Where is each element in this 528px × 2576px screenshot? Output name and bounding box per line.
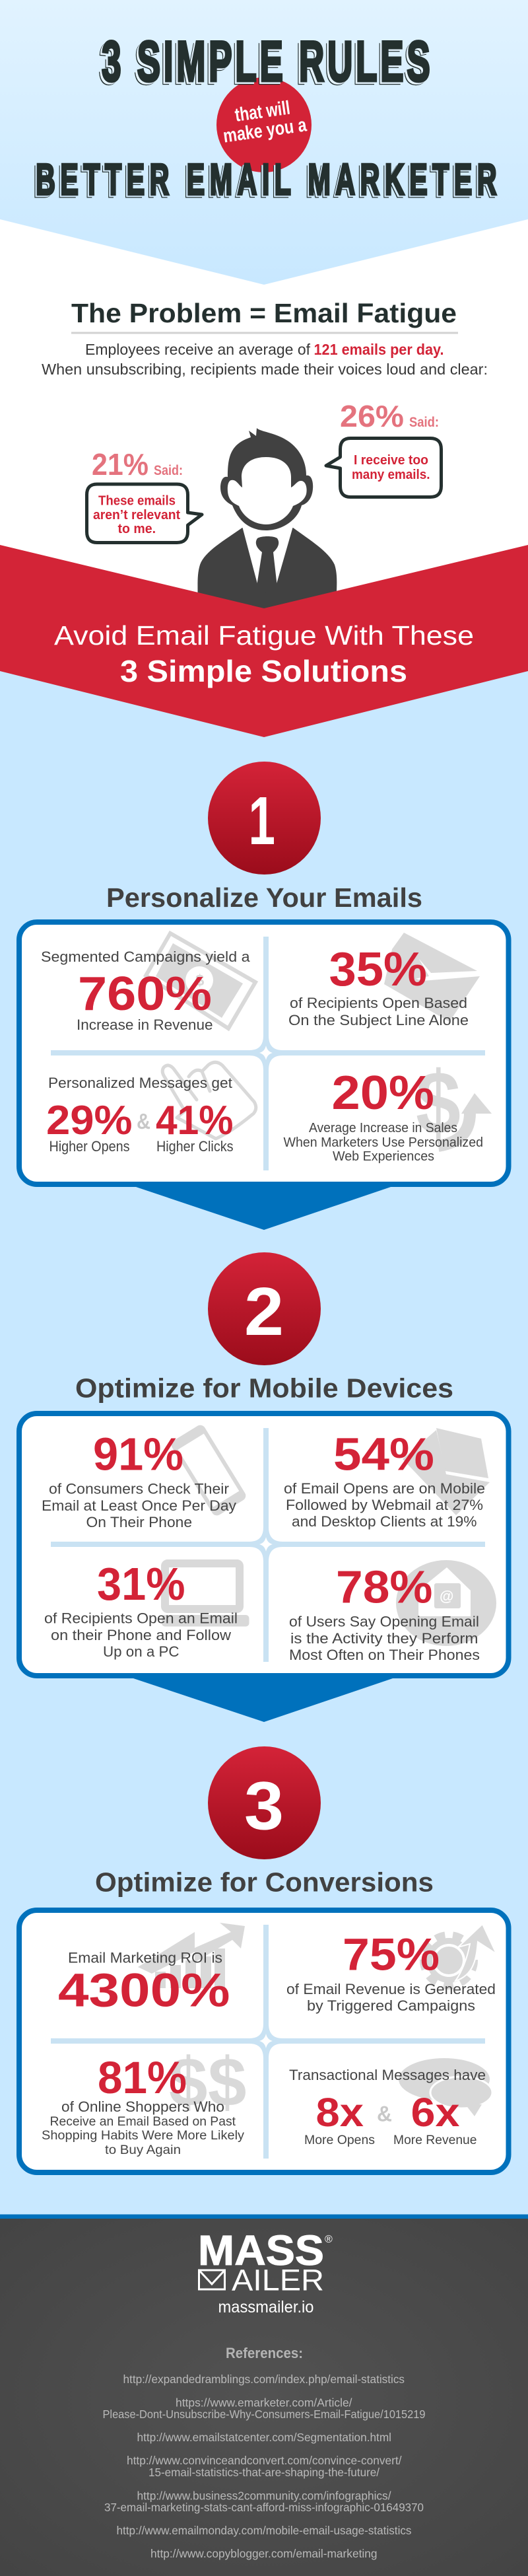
references list: http://www.business2community.com/infographics/ (137, 2489, 391, 2502)
title line two: BETTER EMAIL MARKETER (34, 157, 495, 205)
stat: 31%: on their Phone and Follow (51, 1627, 231, 1643)
stat: 31%: Up on a PC (103, 1643, 180, 1660)
stat: 54%: Followed by Webmail at 27% (286, 1497, 483, 1513)
icon: open envelope (403, 1428, 490, 1515)
stat: 760% increase (41, 948, 250, 1033)
stat: 81% shoppers: Shopping Habits Were More Likely (42, 2129, 245, 2143)
heading: the problem: The Problem = Email Fatigue (71, 298, 457, 328)
number badge 2: 2 (244, 1273, 284, 1349)
stat: 8x and 6x: & (377, 2102, 392, 2126)
stat: 29% and 41%: Higher Clicks (156, 1138, 234, 1155)
title line two: BETTER EMAIL MARKETER (33, 157, 494, 206)
title: 3 SIMPLE RULES (99, 33, 428, 96)
stat: 29% and 41%: Personalized Messages get (48, 1075, 232, 1091)
panel 3: conversions (19, 1910, 508, 2172)
logo: Mass Mailer: AILER (232, 2263, 324, 2297)
stat: 20% increase: 20% (331, 1067, 434, 1120)
website: massmailer.io (218, 2298, 314, 2316)
heading: optimize for mobile devices: Optimize for Mobile Devices (75, 1373, 453, 1403)
icon: email speech bubble: @ (440, 1588, 453, 1604)
badge text: that will (234, 97, 292, 126)
stat: 4300% ROI: 4300% (58, 1964, 230, 2017)
stat: 760% increase: Increase in Revenue (77, 1017, 213, 1033)
references list: http://www.convinceandconvert.com/convince-convert/ (127, 2454, 402, 2467)
icon: dollar with arrow (416, 1053, 492, 1153)
red chevron banner (0, 545, 528, 737)
stat: 81% shoppers: 81% (98, 2052, 187, 2103)
logo: Mass Mailer: MASS (198, 2227, 324, 2274)
stat: 54% (284, 1428, 485, 1530)
stat: 26% said: 26% (340, 399, 404, 433)
icon: laptop (162, 1563, 249, 1626)
references list: http://expandedramblings.com/index.php/email-statistics (123, 2373, 405, 2386)
title line two: BETTER EMAIL MARKETER (36, 155, 497, 204)
title: 3 SIMPLE RULES (100, 32, 428, 96)
references list: http://www.emailmonday.com/mobile-email-usage-statistics (116, 2524, 412, 2537)
logo: Mass Mailer (198, 2227, 333, 2297)
stat: 29% and 41%: & (137, 1109, 150, 1133)
logo: Mass Mailer: ® (325, 2234, 333, 2245)
speech bubble: these emails aren't relevant to me (87, 484, 202, 543)
stat: 20% increase (284, 1067, 483, 1164)
references list: 15-email-statistics-that-are-shaping-the-future/ (148, 2466, 380, 2479)
stat: 91%: of Consumers Check Their (49, 1481, 229, 1497)
title: 3 SIMPLE RULES (102, 30, 430, 94)
intro text (42, 341, 488, 378)
badge text: make you a (222, 114, 308, 147)
stat: 31%: 31% (97, 1558, 185, 1610)
stat: 78%: of Users Say Opening Email (289, 1613, 479, 1630)
stat: 78%: is the Activity they Perform (290, 1630, 478, 1647)
stat: 81% shoppers: to Buy Again (105, 2143, 181, 2157)
references list (103, 2373, 425, 2560)
icon: gear with arrow (425, 1924, 496, 1984)
speech bubble: I receive too many emails: I receive too (354, 453, 428, 468)
stat: 81% shoppers (42, 2052, 245, 2157)
number badge 3 (208, 1746, 321, 1859)
stat: 75% revenue: by Triggered Campaigns (307, 1997, 475, 2014)
speech bubble: these emails aren't relevant to me: to me. (117, 522, 156, 536)
panel: the problem (42, 298, 488, 611)
stat: 4300% ROI: Email Marketing ROI is (68, 1950, 222, 1966)
stat: 21% said: Said: (154, 463, 183, 478)
icon: dollar bill: $ (195, 972, 205, 989)
stat: 75% revenue: of Email Revenue is Generated (286, 1981, 496, 1997)
stat: 91% (42, 1428, 236, 1530)
references list: https://www.emarketer.com/Article/ (176, 2396, 352, 2410)
stat: 21% said (92, 447, 183, 482)
stat: 8x and 6x: 8x (315, 2090, 364, 2135)
stat: 8x and 6x: 6x (411, 2090, 460, 2135)
footer (0, 2214, 528, 2576)
icon: pointing hand (162, 1062, 256, 1139)
stat: 8x and 6x: More Revenue (393, 2133, 477, 2147)
references list: http://www.emailstatcenter.com/Segmentation.html (137, 2431, 391, 2444)
icon: dollar bill (146, 933, 255, 1028)
references list: http://www.copyblogger.com/email-marketing (150, 2547, 378, 2560)
stat: 54%: 54% (333, 1428, 434, 1480)
stat: 81% shoppers: Receive an Email Based on Past (50, 2115, 236, 2129)
stat: 8x and 6x: More Opens (304, 2133, 375, 2147)
number badge 2 (208, 1252, 321, 1365)
stat: 54%: and Desktop Clients at 19% (292, 1513, 477, 1530)
stat: 8x and 6x (289, 2067, 486, 2147)
stat: 35% open: On the Subject Line Alone (288, 1012, 469, 1028)
stat: 78% (289, 1561, 480, 1663)
stat: 8x and 6x: Transactional Messages have (289, 2067, 486, 2083)
stat: 760% increase: Segmented Campaigns yield a (41, 948, 250, 965)
stat: 26% said (340, 399, 439, 433)
red badge circle (216, 77, 312, 172)
references heading: References: (226, 2345, 303, 2361)
icon: dollar signs: $ (169, 2044, 207, 2121)
stat: 91%: Email at Least Once Per Day (42, 1497, 236, 1514)
stat: 21% said: 21% (92, 447, 148, 482)
number badge 3: 3 (244, 1768, 284, 1844)
header background (0, 0, 528, 285)
stat: 20% increase: When Marketers Use Personalized (284, 1135, 483, 1150)
red chevron banner: 3 Simple Solutions (120, 654, 407, 688)
stat: 75% revenue (286, 1929, 496, 2014)
badge text (219, 95, 308, 147)
stat: 78%: Most Often on Their Phones (289, 1647, 480, 1663)
stat: 31%: of Recipients Open an Email (44, 1610, 238, 1626)
speech bubble: these emails aren't relevant to me: aren’t relevant (93, 508, 180, 522)
stat: 91%: On Their Phone (86, 1514, 192, 1530)
stat: 35% open: of Recipients Open Based (290, 995, 467, 1011)
icon: dollar signs (169, 2044, 246, 2121)
stat: 29% and 41%: Higher Opens (49, 1138, 129, 1155)
stat: 81% shoppers: of Online Shoppers Who (61, 2098, 224, 2115)
stat: 35% open: 35% (329, 943, 427, 996)
heading: personalize your emails: Personalize Your Emails (106, 882, 422, 913)
icon: rising chart arrow (138, 1923, 245, 1988)
stat: 29% and 41%: 41% (156, 1098, 234, 1143)
references list: Please-Dont-Unsubscribe-Why-Consumers-Email-Fatigue/1015219 (103, 2408, 425, 2421)
icon: email speech bubble (396, 1560, 496, 1646)
stat: 35% open (288, 943, 469, 1028)
panel 2: mobile (19, 1413, 508, 1722)
heading: optimize for conversions: Optimize for Conversions (95, 1867, 434, 1897)
icon: smartphone (170, 1423, 248, 1517)
stat: 29% and 41%: 29% (46, 1098, 132, 1143)
icon: dollar with arrow: $ (416, 1053, 461, 1153)
icon: speech bubbles (399, 2058, 492, 2116)
speech bubble: these emails aren't relevant to me: These emails (98, 494, 176, 509)
stat: 54%: of Email Opens are on Mobile (284, 1480, 485, 1497)
speech bubble: I receive too many emails: many emails. (352, 468, 430, 482)
banner text: Avoid Email Fatigue With These (54, 620, 474, 651)
number badge 1: 1 (248, 783, 275, 859)
stat: 26% said: Said: (409, 415, 439, 430)
icon: dollar signs: $ (208, 2044, 246, 2121)
stat: 29% and 41% (46, 1075, 234, 1155)
stat: 91%: 91% (93, 1428, 183, 1480)
stat: 4300% ROI (58, 1950, 230, 2017)
speech bubble: I receive too many emails (326, 439, 441, 497)
icon: envelope (384, 933, 480, 1022)
intro text: 121 emails per day. (314, 341, 444, 358)
references list: 37-email-marketing-stats-cant-afford-miss-infographic-01649370 (104, 2501, 424, 2514)
stat: 760% increase: 760% (78, 968, 212, 1020)
stat: 75% revenue: 75% (343, 1929, 440, 1980)
stat: 20% increase: Web Experiences (333, 1149, 434, 1164)
intro text: When unsubscribing, recipients made their voices loud and clear: (42, 361, 488, 378)
stat: 78%: 78% (336, 1561, 433, 1613)
stat: 31% (44, 1558, 238, 1660)
panel 1: personalize (19, 922, 508, 1230)
number badge 1 (208, 762, 321, 875)
intro text: Employees receive an average of (85, 341, 311, 358)
icon: businessman (197, 428, 337, 611)
stat: 20% increase: Average Increase in Sales (309, 1120, 457, 1135)
